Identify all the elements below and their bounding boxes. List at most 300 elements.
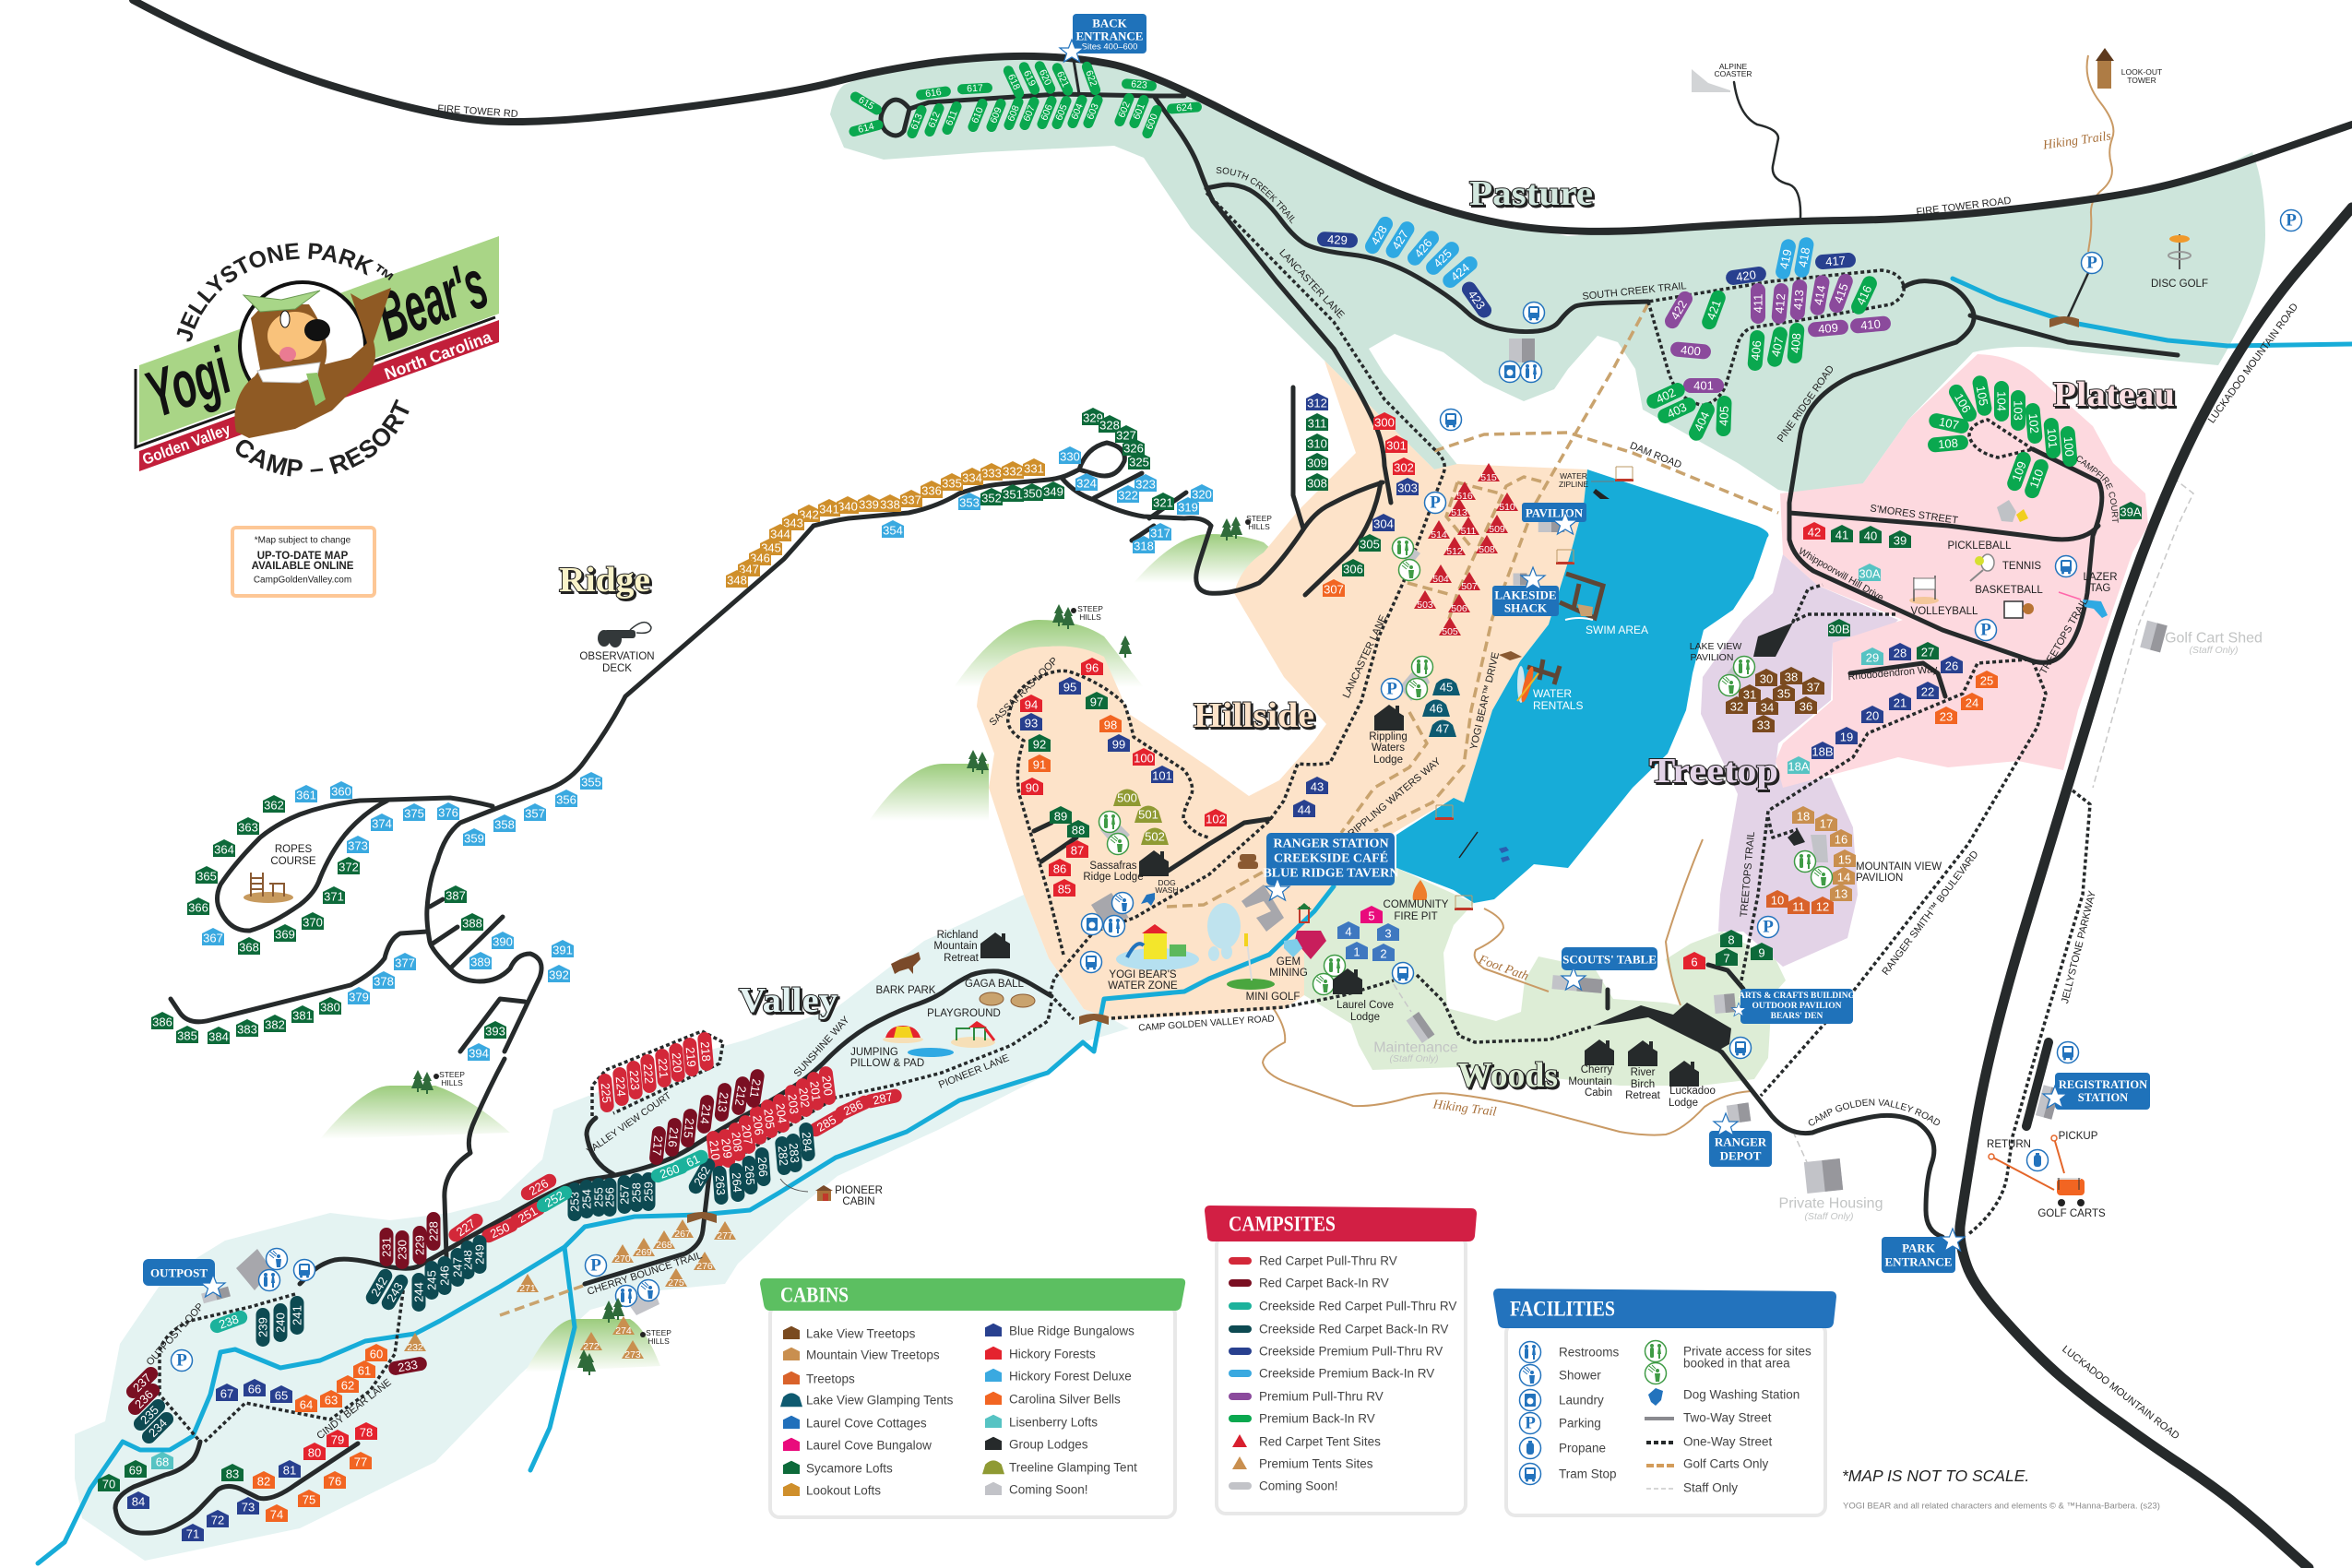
labels: points of interest: PILLOW & PAD [850,1058,924,1069]
callout: outpost: OUTPOST [150,1265,208,1280]
sites: pasture RV pills: 411 [1751,294,1765,313]
sites: valley RV pills: 254 [579,1189,594,1209]
sites: ridge cabins: 355 [581,775,601,790]
cabins legend rows: Hickory Forests [1009,1347,1096,1361]
sites: valley RV pills: 237 [130,1371,154,1395]
labels: points of interest: YOGI BEAR'S [1109,969,1177,980]
sites: ridge cabins: 353 [959,496,980,509]
callout: outpost [143,1259,215,1286]
sites: valley RV pills: 210 [707,1139,723,1161]
labels: road names: OUTPOST LOOP [145,1301,206,1368]
sites: plateau RV pills: 108 [1938,436,1958,451]
cabins header: CABINS [780,1284,849,1306]
sites: hillside cabins: 306 [1343,563,1363,576]
labels: points of interest: VOLLEYBALL [1911,606,1978,617]
sites: back entrance premium back-in RV pills: 624 [1176,101,1193,114]
labels: points of interest: OBSERVATION [579,651,655,662]
sites: plateau RV pills: 109 [2009,459,2029,483]
icons: parking: P [1386,679,1397,699]
labels: trails: Hiking Trail [1431,1098,1497,1120]
sites: ridge cabins: 371 [324,889,344,904]
sites: back entrance premium back-in RV pills: 619 [1021,69,1038,89]
sites: valley RV pills: 255 [592,1187,605,1207]
sites: ridge cabins: 338 [880,498,900,511]
icon: volleyball net [1909,576,1939,604]
sites: plateau and treetop cabins: 28 [1894,646,1907,660]
sites: back entrance premium back-in RV pills: 615 [856,94,876,113]
sites: outpost cabins: 69 [129,1463,142,1478]
sites: plateau and treetop cabins: 35 [1777,686,1790,701]
sites: valley RV pills: 211 [747,1078,764,1099]
labels: staff only buildings: (Staff Only) [1389,1053,1439,1064]
labels: steep hills: HILLS [647,1336,670,1346]
sites: plateau and treetop cabins: 30 [1760,671,1773,686]
icons: location stars [201,40,2067,1297]
sites: valley RV pills: 238 [217,1312,241,1332]
labels: road names: LUCKADOO MOUNTAIN ROAD [2060,1344,2181,1442]
sites: plateau and treetop cabins: 25 [1980,673,1993,688]
cabins legend rows: Lookout Lofts [806,1483,881,1498]
labels: steep hills: STEEP [646,1328,671,1337]
labels: road names: SOUTH CREEK TRAIL [1216,167,1295,223]
cabins legend rows: Laurel Cove Bungalow [806,1439,932,1452]
labels: points of interest: ZIPLINE [1559,480,1588,489]
labels: road names: PINE RIDGE ROAD [1776,363,1836,445]
sites: back entrance premium back-in RV pills: 608 [1005,103,1022,123]
region titles: Hillside [1194,696,1314,735]
logo green band [139,236,499,443]
sites: ridge cabins: 327 [1116,428,1136,443]
sites: back entrance premium back-in RV pills: 614 [857,121,875,136]
labels: road names: DAM ROAD [1628,440,1683,471]
sites: pasture RV pills: 419 [1776,248,1795,270]
icon: wood pile [1238,854,1258,869]
sites: valley RV pills: 263 [713,1175,728,1195]
sites: plateau and treetop cabins: 23 [1940,710,1953,723]
sites: hillside cabins: 98 [1104,718,1117,732]
sites: ridge cabins: 332 [1003,465,1023,478]
sites: pasture RV pills: 413 [1791,290,1806,310]
sites: plateau and treetop cabins: 14 [1837,871,1850,884]
labels: points of interest: LAZER [2083,572,2118,583]
sites: ridge cabins: 324 [1076,476,1097,491]
notice: map subject to change: AVAILABLE ONLINE [252,561,354,572]
cabins legend rows: Lake View Treetops [806,1326,916,1341]
sites: valley RV pills: 216 [665,1126,682,1148]
logo arc text [177,243,410,476]
one-way roads [160,193,2090,1442]
callout: ranger station: RANGER STATION [1273,837,1389,850]
icon: gaga ball pits [980,992,1035,1007]
sites: ridge cabins: 365 [196,869,217,884]
sites: hillside cabins: 102 [1206,812,1226,826]
callout: back entrance: Sites 400–600 [1082,42,1137,52]
labels: road names: CHERRY BOUNCE TRAIL [586,1250,704,1298]
sites: back entrance premium back-in RV pills: 616 [924,87,943,100]
callout: ranger station: BLUE RIDGE TAVERN [1263,867,1399,880]
icon: ropes course [244,873,293,903]
region: plateau [1776,354,2148,788]
sites: ridge cabins: 386 [152,1015,172,1029]
icons: lodges [980,705,1699,1087]
sites: ridge cabins: 318 [1134,539,1154,553]
pioneer cabin leader line [780,1179,808,1192]
sites: ridge cabins: 328 [1099,419,1120,432]
sites: back entrance premium back-in RV pills: 601 [1131,101,1147,121]
sites: valley RV pills: 282 [776,1146,790,1166]
sites: plateau and treetop cabins: 42 [1808,526,1821,539]
sites: plateau and treetop cabins: 17 [1820,817,1833,830]
sites: outpost cabins: 68 [156,1455,169,1468]
sites: pasture RV pills: 409 [1818,321,1838,336]
sites: outpost cabins: 71 [186,1527,199,1540]
labels: points of interest: River [1631,1067,1656,1078]
sites: pasture RV pills: 417 [1825,254,1846,268]
sites: plateau and treetop cabins: 41 [1835,528,1848,542]
panel: campsites legend [1205,1206,1477,1514]
icons: swings [1435,467,1633,910]
sites: pasture RV pills: 418 [1796,246,1812,268]
icon: docks [1527,574,1603,684]
sites: hillside cabins: 90 [1026,780,1039,795]
region: pasture [830,55,2265,495]
icon: jumping pillow and pad [883,1026,954,1057]
sites: hillside cabins: 501 [1138,808,1158,821]
labels: points of interest: CABIN [842,1196,875,1207]
campsites legend rows: Premium Pull-Thru RV [1259,1389,1384,1404]
sites: valley RV pills: 233 [397,1358,419,1374]
sites: back entrance premium back-in RV pills: 622 [1083,69,1099,88]
sites: valley RV pills: 222 [641,1063,656,1084]
sites: pasture RV pills: 416 [1854,283,1874,307]
labels: road names: SASSAFRAS LOOP [988,656,1060,728]
sites: ridge cabins: 337 [901,493,921,507]
sites: hillside cabins: 86 [1053,861,1066,876]
sites: hillside cabins: 44 [1298,802,1311,817]
cabins legend rows [780,1324,1137,1498]
logo: Yogi Bear's Jellystone Park Camp-Resort [135,236,499,476]
sites: plateau and treetop cabins: 22 [1921,684,1934,699]
sites: plateau and treetop cabins: 34 [1761,701,1774,714]
sites: hillside cabins: 95 [1063,681,1076,694]
sites: back entrance premium back-in RV pills: 603 [1085,101,1101,121]
sites: valley RV pills: 251 [516,1204,540,1226]
sites: hillside cabins: 310 [1307,437,1327,450]
sites: outpost cabins: 83 [226,1467,239,1481]
labels: points of interest: LOOK-OUT [2121,67,2162,77]
sites: back entrance premium back-in RV pills: 609 [988,105,1004,125]
grey buildings [201,339,2168,1315]
sites: valley RV pills: 227 [454,1217,478,1239]
icon: fire pit [1413,880,1427,900]
sites: ridge cabins: 380 [320,1000,340,1015]
icon: ponds [1207,903,1241,961]
icon: bark park dog [891,952,921,974]
sites: ridge cabins: 361 [296,788,316,802]
sites: pasture RV pills: 406 [1749,340,1764,361]
sites: red carpet tent sites: 510 [1499,502,1515,513]
sites: valley RV pills: 259 [642,1182,655,1202]
sites: ridge cabins: 348 [727,574,747,587]
sites: valley RV pills: 213 [715,1091,731,1113]
sites: hillside cabins: 308 [1307,476,1327,491]
sites: ridge cabins: 360 [331,784,351,799]
labels: points of interest: Retreat [1625,1090,1661,1101]
icon: binoculars [598,623,651,647]
sites: valley RV pills: 262 [691,1164,713,1188]
sites: back entrance premium back-in RV pills: 606 [1039,102,1055,122]
labels: road names: CAMP GOLDEN VALLEY ROAD [1808,1099,1941,1125]
labels: road names: TREETOPS TRAIL [2038,597,2090,676]
sites: ridge cabins: 321 [1153,496,1173,509]
icons: parking: P [2086,253,2097,273]
sites: back entrance premium back-in RV pills: 621 [1054,70,1071,89]
sites: outpost cabins: 78 [360,1426,373,1439]
sites: ridge cabins: 322 [1118,489,1138,502]
sites: hillside cabins: 305 [1360,537,1380,552]
sites: plateau and treetop cabins: 39A [2120,505,2142,518]
sites: valley RV pills: 217 [649,1134,666,1157]
labels: staff only buildings: (Staff Only) [2189,645,2239,656]
labels: trails [1431,129,2112,1120]
labels: points of interest: TAG [2090,583,2110,594]
facilities legend rows: Restrooms [1559,1345,1620,1360]
sites: ridge cabins: 359 [464,832,484,845]
icon: basketball [2004,601,2034,618]
sites: hillside cabins: 93 [1025,716,1038,731]
sites: ridge cabins: 350 [1022,487,1042,500]
sites: plateau and treetop cabins: 6 [1691,956,1698,968]
logo red band [139,320,499,471]
icon: alpine coaster [1692,69,1730,92]
sites: pasture RV pills: 405 [1716,406,1731,426]
icons: parking: P [1763,917,1774,937]
sites: valley RV pills: 231 [380,1237,393,1257]
callout: arts and crafts: BEARS' DEN [1771,1012,1823,1021]
sites: pasture RV pills: 408 [1788,333,1803,353]
sites: ridge cabins: 364 [214,843,234,856]
callout: back entrance: ENTRANCE [1076,30,1143,42]
sites: ridge cabins: 374 [372,817,392,830]
staff only paths [1394,478,2193,1162]
sites: hillside cabins: 87 [1071,843,1084,858]
sites: premium tent sites: 276 [696,1261,713,1272]
labels: steep hills: HILLS [441,1078,463,1087]
sites: ridge cabins: 356 [556,793,576,806]
sites: valley RV pills: 239 [256,1317,269,1337]
labels: points of interest: PAVILION [1691,652,1733,663]
sites: hillside cabins: 92 [1033,738,1046,751]
sites: ridge cabins: 342 [799,507,819,522]
sites: pasture RV pills: 412 [1773,293,1788,314]
labels: points of interest: WATER [1560,471,1587,481]
logo band text [137,245,497,469]
facilities legend rows: Shower [1559,1369,1601,1382]
hills: steep hill gradients [320,534,1309,1372]
callout: arts and crafts [1739,989,1856,1024]
sites: back entrance premium back-in RV pills: 612 [926,110,943,129]
sites: outpost cabins: 80 [308,1446,321,1459]
icons: parking: P [2286,210,2297,231]
campsites legend rows: Red Carpet Tent Sites [1259,1435,1381,1448]
sites: hillside cabins: 2 [1380,946,1387,961]
sites: ridge cabins: 339 [859,498,879,511]
sites: ridge cabins: 326 [1123,441,1144,456]
sites: hillside cabins: 311 [1308,417,1326,430]
sites: outpost cabins: 61 [358,1363,371,1378]
icons: public restrooms, showers, laundry, propane [258,362,2048,1306]
icon: tennis racket [1970,554,1994,581]
labels: points of interest: MINING [1269,968,1308,979]
sites: pasture RV pills: 420 [1735,267,1757,284]
campsites legend rows: Premium Tents Sites [1259,1457,1373,1470]
sites: hillside cabins: 312 [1307,397,1327,410]
sites: ridge cabins: 375 [404,806,424,821]
sites: valley RV pills: 283 [787,1143,802,1163]
sites: valley RV pills: 245 [424,1270,439,1290]
labels: points of interest: Retreat [944,953,980,964]
sites: hillside cabins: 3 [1384,926,1392,941]
sites: ridge cabins: 378 [374,974,394,989]
sites: pasture RV pills: 424 [1448,260,1472,284]
sites: pasture RV pills: 422 [1668,298,1690,322]
labels: points of interest: FIRE PIT [1394,911,1438,922]
sites: back entrance premium back-in RV pills: 604 [1069,101,1086,121]
labels: points of interest: GAGA BALL [965,979,1025,990]
callout: ranger station [1263,833,1399,885]
sites: red carpet tent sites: 506 [1451,603,1467,614]
icons: parking: P [590,1256,601,1275]
sites: valley RV pills: 218 [698,1041,713,1062]
sites: valley RV pills: 257 [618,1184,631,1205]
sites: red carpet tent sites [1414,463,1518,637]
sites: ridge cabins: 344 [770,528,790,540]
sites: ridge cabins: 366 [188,900,208,915]
labels: steep hills: HILLS [1079,612,1101,622]
callout: back entrance [1073,14,1146,53]
labels: points of interest: Cherry [1581,1064,1612,1075]
sites: outpost cabins [98,1344,387,1541]
labels: points of interest: DOG [1158,878,1176,887]
icons: bridges [687,316,2079,1223]
sites: valley RV pills: 200 [819,1075,836,1097]
region: hillside [977,361,1587,1020]
sites: ridge cabins: 330 [1060,450,1080,463]
sites: ridge cabins: 390 [493,935,513,948]
sites: valley RV pills: 202 [796,1087,813,1109]
sites: plateau RV pills: 107 [1938,414,1960,433]
sites: premium tent sites: 268 [656,1240,672,1251]
sites: hillside cabins: 1 [1353,944,1360,959]
icons: parking [172,210,2302,1371]
labels: road names: YOGI BEAR™ DRIVE [1468,651,1502,751]
sites: valley RV pills: 284 [800,1132,814,1152]
notice: map subject to change: UP-TO-DATE MAP [257,551,349,562]
sites: valley RV pills: 266 [755,1157,770,1177]
sites: ridge cabins: 336 [921,483,942,498]
sites: premium tent sites: 275 [668,1277,684,1289]
region titles: Plateau [2053,375,2175,414]
callout: park entrance: PARK [1902,1241,1936,1254]
sites: ridge cabins: 362 [264,799,284,812]
facilities legend rows [1520,1341,1812,1494]
sites: ridge cabins: 383 [237,1022,257,1037]
labels: road names: CAMPFIRE COURT [2077,456,2119,523]
sites: premium tent sites [404,1219,736,1360]
labels: points of interest: RETURN [1987,1139,2031,1150]
sites: valley RV pills: 247 [450,1257,465,1277]
labels: points of interest: RENTALS [1533,699,1583,712]
sites: red carpet tent sites: 516 [1456,491,1473,502]
sites: pasture RV pills: 414 [1812,284,1828,306]
sites: back entrance premium back-in RV pills: 602 [1116,100,1133,119]
sites: valley RV pills: 219 [683,1047,698,1067]
sites: ridge cabins: 385 [177,1029,197,1042]
sites: valley RV pills: 201 [807,1080,824,1102]
labels: road names: PIONEER LANE [937,1052,1011,1091]
cabins legend rows: Lisenberry Lofts [1009,1415,1098,1430]
sites: pasture RV pills: 400 [1681,343,1701,358]
sites: plateau and treetop cabins: 31 [1743,688,1756,701]
labels: staff only buildings: Maintenance [1373,1040,1458,1055]
sites: plateau RV pills: 105 [1974,385,1990,407]
labels: points of interest: Laurel Cove [1336,1000,1394,1011]
cabins legend rows: Coming Soon! [1009,1483,1088,1496]
facilities legend rows: One-Way Street [1683,1435,1773,1448]
sites: back entrance premium back-in RV pills: 610 [969,105,986,125]
sites: pasture RV pills: 426 [1411,236,1435,260]
icon: fishing and fish [1459,832,1510,862]
sites: plateau RV pills: 104 [1994,391,2009,411]
sites: ridge cabins: 340 [837,500,858,513]
callout: lakeside shack: LAKESIDE [1494,588,1557,601]
facilities legend rows: Private access for sites [1683,1345,1812,1358]
sites: plateau and treetop cabins: 39 [1894,533,1907,548]
sites: valley RV pills: 212 [732,1085,749,1107]
sites: valley RV pills: 248 [461,1250,474,1270]
labels: points of interest: DISC GOLF [2151,279,2208,290]
icon: lazer tag [2059,592,2108,618]
sites: outpost cabins: 74 [270,1507,283,1522]
icon: disc golf basket [2168,234,2191,269]
sites: red carpet tent sites: 511 [1461,526,1477,537]
facilities legend rows: Staff Only [1683,1481,1738,1494]
sites: ridge cabins: 349 [1043,485,1063,498]
labels: points of interest: GEM [1277,956,1301,968]
sites: hillside cabins: 303 [1397,481,1418,494]
sites: back entrance premium back-in RV pills: 600 [1144,112,1160,131]
sites: ridge cabins: 373 [348,839,368,852]
sites: outpost cabins: 84 [132,1494,145,1509]
note: map is not to scale: *MAP IS NOT TO SCALE. [1842,1467,2029,1485]
icon: mini golf [1227,933,1275,990]
sites: plateau and treetop cabins: 29 [1866,651,1879,664]
copyright: YOGI BEAR and all related characters and elements © & ™Hanna-Barbera. (s23) [1843,1502,2160,1511]
facilities legend rows: P [1525,1413,1536,1433]
logo circle [240,282,365,410]
sites: ridge cabins: 363 [238,821,258,834]
logo bear [234,288,391,438]
region: treetop [1701,554,1898,967]
sites: valley RV pills: 287 [872,1089,894,1108]
labels: road names: LANCASTER LANE [1277,247,1347,321]
callout: lakeside shack: SHACK [1504,601,1548,614]
logo band text: Golden Valley [140,421,233,469]
labels: points of interest: Luckadoo [1669,1086,1716,1097]
sites: ridge cabins: 384 [208,1029,229,1044]
callout: park entrance [1882,1237,1955,1273]
callout: ranger depot [1709,1131,1772,1167]
